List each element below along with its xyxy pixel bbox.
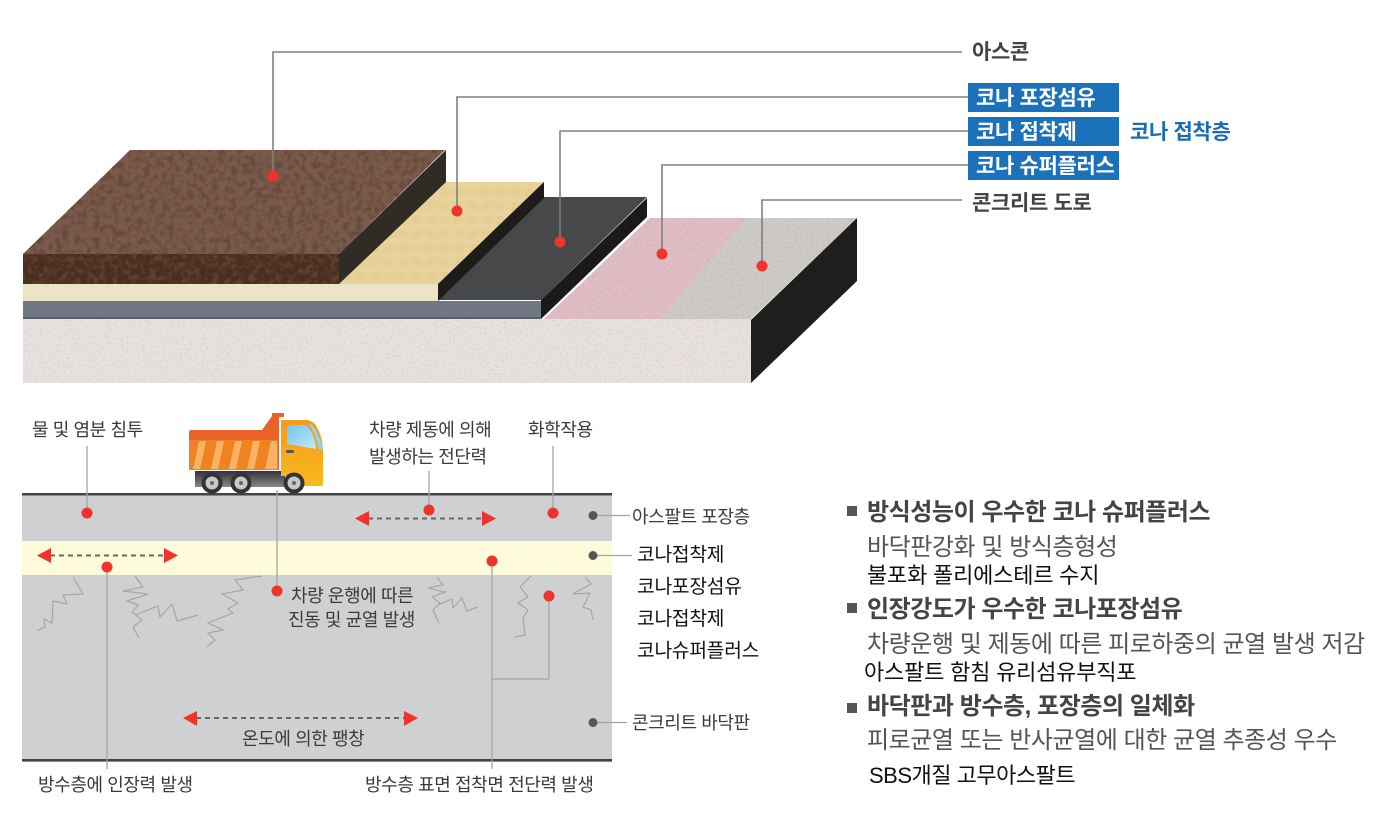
feature 2: 아스팔트 함침 유리섬유부직포: [864, 660, 1136, 685]
layered pavement diagram: [20, 148, 860, 383]
label: 화학작용: 화학작용: [528, 420, 593, 440]
label: 차량 제동 전단력: 차량 제동에 의해: [369, 420, 491, 440]
feature 3: 피로균열 또는 반사균열에 대한 균열 추종성 우수: [867, 727, 1337, 754]
label: 방수층에 인장력 발생: 방수층에 인장력 발생: [38, 775, 193, 795]
label: 방수층 표면 접착면 전단력 발생: 방수층 표면 접착면 전단력 발생: [365, 775, 593, 795]
feature 1: 방식성능이 우수한 코나 슈퍼플러스: [867, 499, 1210, 526]
grey markers: [588, 511, 598, 727]
label: 차량 운행 진동 및 균열: 차량 운행에 따른: [291, 586, 413, 606]
cross-section diagram: [22, 446, 632, 769]
label: 물 및 염분 침투: 물 및 염분 침투: [32, 420, 143, 440]
label: 코나 접착층: 코나 접착층: [1130, 121, 1230, 144]
label: 코나포장섬유: 코나포장섬유: [637, 576, 742, 598]
red dots: [82, 504, 558, 602]
label: 코나접착제: 코나접착제: [637, 608, 724, 630]
label: 콘크리트 바닥판: 콘크리트 바닥판: [632, 713, 750, 733]
label: 코나접착제: 코나접착제: [637, 544, 724, 566]
arrow: thermal expansion: [183, 711, 418, 726]
arrow: shear force: [355, 511, 496, 526]
label: 차량 운행 진동 및 균열: 진동 및 균열 발생: [288, 610, 415, 630]
cracks: [37, 576, 593, 647]
label: 차량 운행 진동 및 균열: [288, 586, 415, 630]
grey adhesive layer: [23, 197, 647, 319]
arrow: tensile force: [37, 548, 178, 563]
feature 1: 불포화 폴리에스테르 수지: [867, 563, 1099, 588]
label: 코나 포장섬유: 코나 포장섬유: [976, 87, 1095, 110]
label: 차량 제동 전단력: [369, 420, 491, 467]
label: 아스팔트 포장층: 아스팔트 포장층: [632, 507, 750, 527]
feature list: [847, 499, 1365, 788]
label: 코나슈퍼플러스: 코나슈퍼플러스: [637, 640, 759, 662]
label: 차량 제동 전단력: 발생하는 전단력: [369, 447, 487, 467]
feature 1: [847, 499, 1210, 588]
feature 3: 바닥판과 방수층, 포장층의 일체화: [867, 693, 1195, 720]
brown ascon layer: [20, 148, 448, 286]
label: 아스콘: 아스콘: [972, 41, 1029, 64]
feature 1: 바닥판강화 및 방식층형성: [867, 534, 1117, 561]
label: 코나 포장섬유: [968, 83, 1119, 112]
label: 코나 슈퍼플러스: 코나 슈퍼플러스: [976, 155, 1114, 178]
leader lines with dots: [268, 52, 968, 272]
leader lines: [87, 446, 632, 769]
label: 온도에 의한 팽창: 온도에 의한 팽창: [242, 729, 364, 749]
label: 콘크리트 도로: 콘크리트 도로: [972, 192, 1091, 215]
feature 3: [847, 693, 1337, 788]
label: 코나 접착제: [968, 117, 1119, 146]
cream fibre layer: [23, 182, 544, 301]
feature 2: 인장강도가 우수한 코나포장섬유: [867, 596, 1183, 623]
feature 2: 차량운행 및 제동에 따른 피로하중의 균열 발생 저감: [867, 631, 1365, 658]
label: 코나 접착제: 코나 접착제: [976, 121, 1076, 144]
feature 2: [847, 596, 1365, 685]
feature 3: SBS개질 고무아스팔트: [869, 763, 1075, 788]
concrete road slab: [23, 215, 860, 383]
icon: dump truck: [189, 413, 323, 494]
